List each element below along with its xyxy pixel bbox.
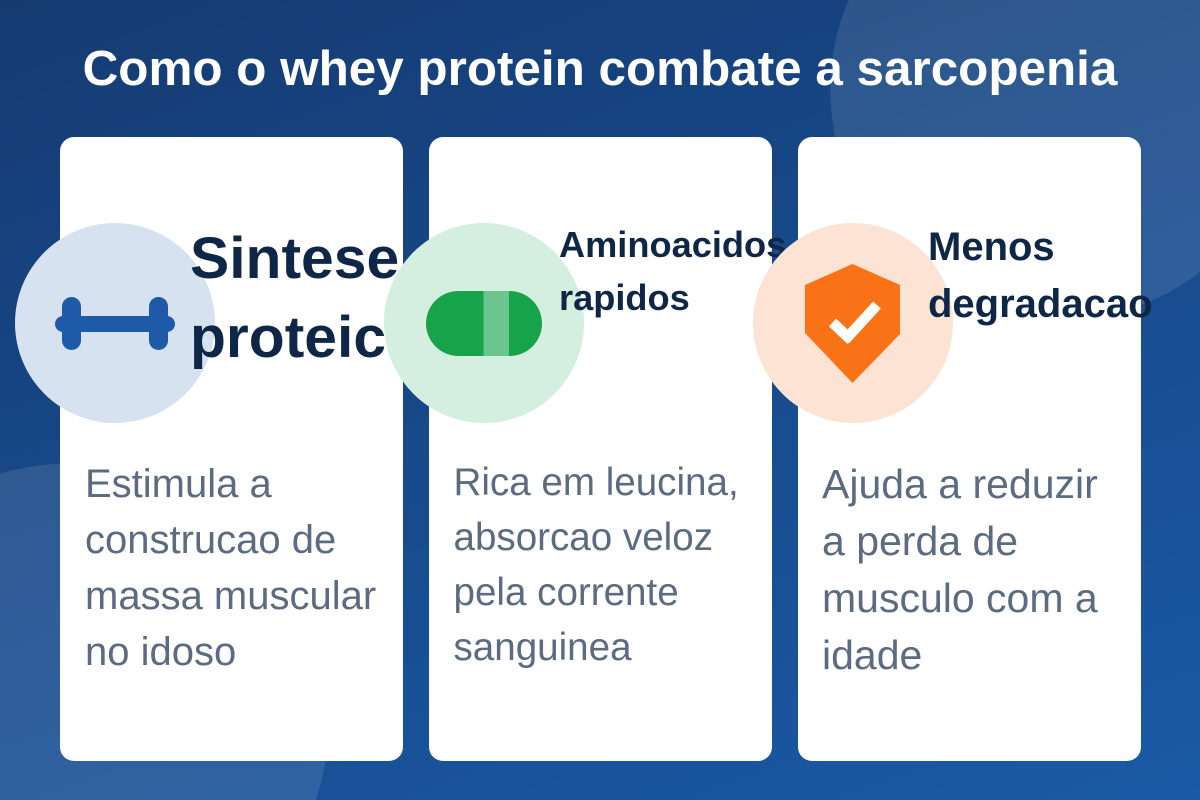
- panel: card 2 background: [429, 137, 772, 761]
- decorative circle: bottom left: [0, 463, 329, 800]
- panel: card 3 background: [798, 137, 1140, 761]
- text: card 3 body: Ajuda a reduzir: [822, 461, 1098, 507]
- heading: menos degradacao: Menos: [928, 225, 1055, 269]
- text: card 1 body: construcao de: [85, 518, 336, 562]
- text: card 1 body: massa muscular: [85, 574, 376, 618]
- heading: sintese proteica: proteica: [190, 305, 419, 370]
- heading: aminoacidos rapidos: rapidos: [559, 277, 690, 318]
- text: card 1 body: [85, 462, 376, 674]
- icon: shield with check: [805, 264, 900, 383]
- heading: aminoacidos rapidos: Aminoacidos: [559, 224, 786, 265]
- icon: dumbbell: [55, 297, 175, 350]
- panel: card 1 background: [60, 137, 403, 761]
- text: card 2 body: sanguinea: [454, 626, 632, 669]
- heading: sintese proteica: Sintese: [190, 226, 399, 291]
- text: card 2 body: absorcao veloz: [454, 516, 713, 559]
- heading: menos degradacao: degradacao: [928, 282, 1153, 326]
- text: card 3 body: [822, 461, 1098, 678]
- title: Como o whey protein combate a sarcopenia: [83, 41, 1117, 96]
- icon circle: shield: [753, 223, 953, 423]
- icon circle: dumbbell: [15, 223, 215, 423]
- heading: aminoacidos rapidos: [559, 224, 786, 318]
- icon: pill: [426, 291, 542, 356]
- text: card 1 body: no idoso: [85, 630, 236, 674]
- heading: menos degradacao: [928, 225, 1153, 326]
- icon circle: pill: [384, 223, 584, 423]
- text: card 3 body: a perda de: [822, 518, 1018, 564]
- decorative circle: top right: [830, 0, 1200, 320]
- text: card 1 body: Estimula a: [85, 462, 272, 506]
- text: card 3 body: idade: [822, 632, 922, 678]
- text: card 2 body: [454, 461, 739, 669]
- heading: sintese proteica: [190, 226, 419, 370]
- text: card 3 body: musculo com a: [822, 575, 1098, 621]
- text: card 2 body: pela corrente: [454, 571, 679, 614]
- text: card 2 body: Rica em leucina,: [454, 461, 739, 504]
